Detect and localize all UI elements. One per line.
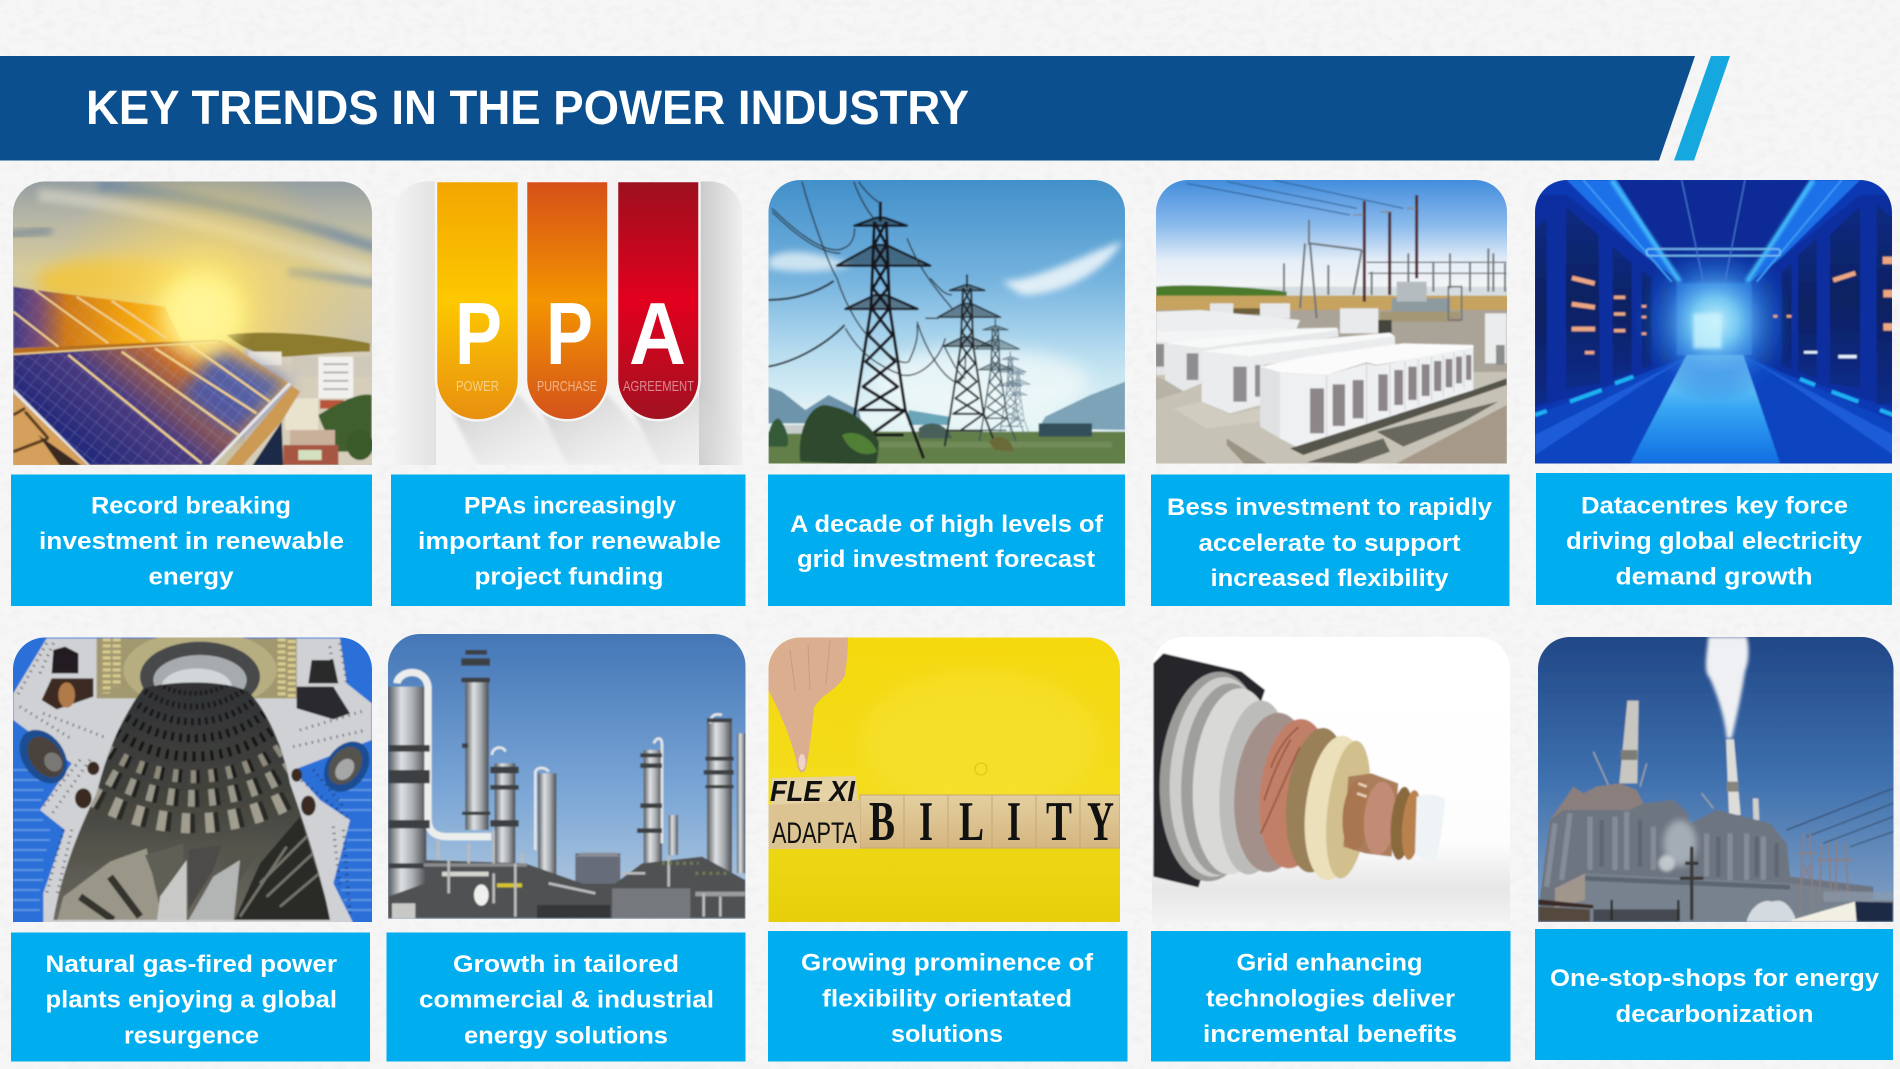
image: PPA capsules: AGREEMENT: [623, 378, 694, 395]
caption: One-stop-shops for energy: [1550, 965, 1880, 992]
caption: Record breaking: [91, 492, 291, 520]
panel: gas-fired power: [11, 638, 372, 1062]
panel: datacentres: [1530, 175, 1900, 605]
caption: grid investment forecast: [797, 546, 1095, 573]
image: PPA capsules: [394, 181, 742, 465]
caption: A decade of high levels of: [790, 511, 1104, 538]
caption: commercial & industrial: [419, 986, 714, 1014]
caption: [1151, 474, 1510, 606]
caption: Bess investment to rapidly: [1167, 494, 1493, 521]
image: cable cross-section: [1152, 637, 1510, 908]
image: flexibility blocks: T: [1046, 791, 1072, 853]
caption: [11, 474, 372, 606]
caption: [386, 932, 746, 1062]
image: solar panels at sunset: [13, 182, 372, 465]
image: flexibility blocks: FLE XI: [770, 776, 856, 808]
caption: driving global electricity: [1566, 528, 1863, 555]
panel: battery storage: [1150, 175, 1515, 606]
panel: decarbonization: [1530, 630, 1900, 1060]
caption: [768, 474, 1125, 606]
caption: technologies deliver: [1206, 986, 1455, 1012]
caption: [391, 474, 746, 606]
caption: accelerate to support: [1198, 530, 1460, 557]
image: PPA capsules: POWER: [456, 378, 499, 395]
caption: plants enjoying a global: [46, 986, 337, 1014]
caption: investment in renewable: [39, 528, 344, 555]
caption: decarbonization: [1616, 1001, 1814, 1028]
caption: PPAs increasingly: [464, 492, 677, 520]
panel: PPAs: [391, 181, 746, 606]
caption: Growing prominence of: [801, 950, 1094, 976]
image: server corridor: [1530, 175, 1900, 470]
caption: project funding: [474, 564, 664, 590]
image: PPA capsules: P: [455, 284, 502, 383]
panel: renewable investment: [5, 155, 380, 606]
image: flexibility blocks: I: [1007, 791, 1021, 853]
caption: flexibility orientated: [822, 986, 1072, 1012]
image: flexibility blocks: L: [959, 791, 984, 853]
banner accent slash: [1674, 56, 1730, 160]
caption: [1536, 473, 1892, 605]
image: PPA capsules: A: [629, 284, 686, 383]
caption: demand growth: [1616, 564, 1812, 590]
caption: [768, 931, 1128, 1062]
image: flexibility blocks: [768, 637, 1120, 922]
title: KEY TRENDS IN THE POWER INDUSTRY: [86, 82, 969, 135]
image: PPA capsules: P: [546, 284, 593, 383]
image: industrial plant: [382, 630, 752, 925]
caption: important for renewable: [418, 528, 721, 555]
image: flexibility blocks: I: [919, 791, 933, 853]
caption: resurgence: [124, 1022, 259, 1050]
image: gas turbine rotor: [13, 638, 372, 922]
caption: Grid enhancing: [1236, 950, 1422, 976]
title banner: [0, 56, 1730, 160]
caption: [1535, 929, 1893, 1060]
caption: [1151, 931, 1510, 1062]
caption: [11, 932, 370, 1062]
panel: commercial and industrial: [382, 630, 752, 1062]
image: flexibility blocks: Y: [1087, 791, 1114, 853]
caption: Natural gas-fired power: [46, 951, 337, 978]
image: transmission pylons: [762, 175, 1132, 470]
image: PPA capsules: PURCHASE: [537, 378, 597, 395]
panel: grid enhancing: [1145, 630, 1515, 1062]
caption: incremental benefits: [1203, 1021, 1457, 1048]
image: power station with smoke: [1530, 630, 1900, 925]
caption: energy: [148, 564, 234, 590]
caption: energy solutions: [464, 1022, 668, 1050]
caption: Datacentres key force: [1581, 492, 1848, 520]
caption: solutions: [891, 1021, 1003, 1048]
image: flexibility blocks: B: [869, 791, 895, 853]
panel: grid investment: [762, 175, 1132, 606]
caption: increased flexibility: [1210, 565, 1449, 592]
image: flexibility blocks: ADAPTA: [772, 817, 857, 850]
image: BESS site: [1150, 175, 1515, 470]
panel: flexibility: [768, 637, 1128, 1062]
caption: Growth in tailored: [453, 951, 679, 978]
